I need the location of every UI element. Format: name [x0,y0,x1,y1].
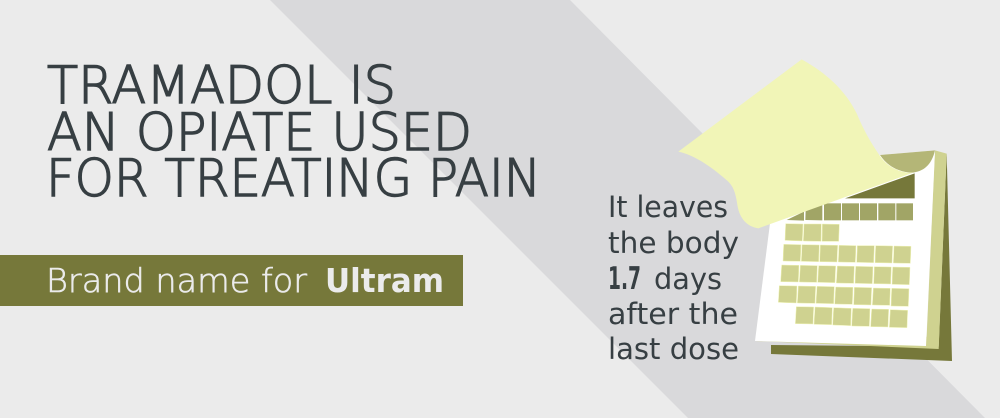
title: FOR TREATING PAIN [46,149,541,209]
duration text [608,190,739,366]
duration text: last dose [608,332,739,366]
calendar page flap [678,59,913,228]
duration text: after the [608,297,738,331]
title: TRAMADOL IS [47,56,396,116]
duration text: 1.7 [608,261,641,297]
title: AN OPIATE USED [47,103,472,163]
duration text: It leaves [608,190,728,224]
icon: calendar [678,59,952,361]
duration text: the body [608,226,739,260]
brand name banner: Ultram [325,261,444,300]
brand name banner: Brand name for [46,261,307,300]
title [46,56,541,209]
duration text: days [654,262,722,296]
brand name banner [0,255,463,306]
